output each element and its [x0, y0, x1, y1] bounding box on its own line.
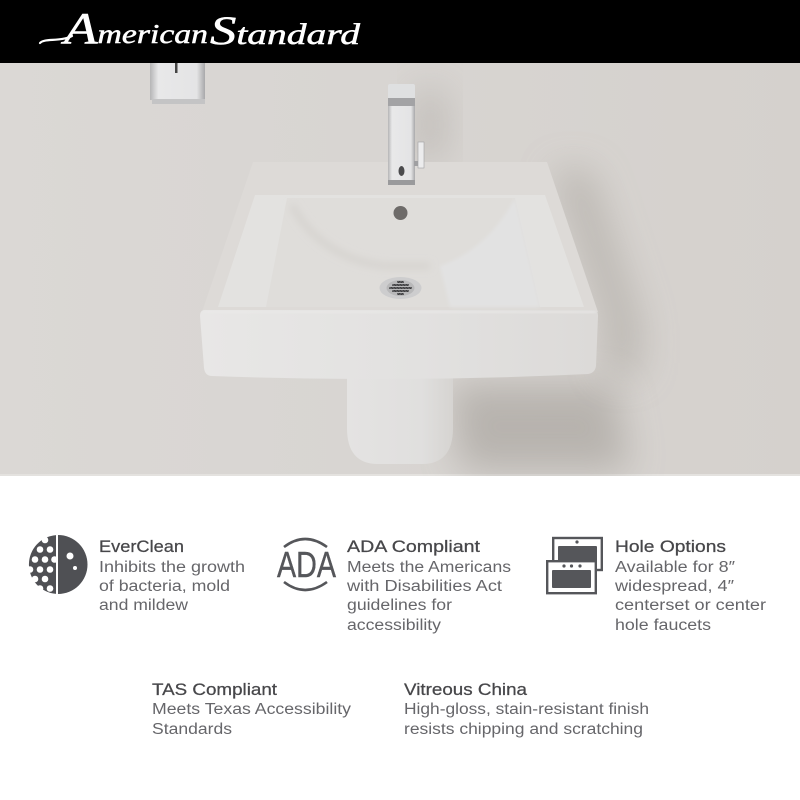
basin rim	[218, 195, 584, 307]
description: TAS Compliant: Standards	[152, 721, 232, 738]
icon: EverClean half-circle	[27, 535, 88, 594]
basin front face	[200, 310, 598, 379]
feature: ADA Compliant	[277, 538, 511, 634]
bowl	[288, 203, 432, 272]
heading: TAS Compliant: TAS Compliant	[152, 681, 277, 699]
description: TAS Compliant: Meets Texas Accessibility	[152, 701, 351, 718]
heading: ADA Compliant: ADA Compliant	[347, 538, 480, 556]
description: EverClean: of bacteria, mold	[99, 578, 230, 595]
feature: TAS Compliant	[152, 681, 351, 738]
description: Hole Options: widespread, 4″	[614, 578, 735, 595]
description: Vitreous China: resists chipping and scratching	[404, 721, 643, 738]
description: Vitreous China	[404, 701, 649, 738]
feature: Vitreous China	[404, 681, 649, 738]
feature: EverClean	[27, 535, 245, 614]
description: ADA Compliant: with Disabilities Act	[346, 578, 503, 595]
overflow hole	[394, 206, 408, 220]
description: ADA Compliant	[346, 559, 511, 634]
pedestal	[347, 378, 453, 464]
photo: wall-mounted sink	[0, 63, 800, 476]
description: Hole Options: centerset or center	[615, 597, 766, 614]
brand logo	[40, 4, 361, 53]
icon: sink hole options	[547, 538, 602, 593]
description: EverClean: Inhibits the growth	[99, 559, 245, 576]
heading: Hole Options: Hole Options	[615, 538, 726, 556]
description: EverClean	[99, 559, 245, 614]
icon: ADA: ADA	[277, 544, 336, 585]
description: ADA Compliant: accessibility	[347, 617, 441, 634]
icon: ADA	[277, 539, 336, 590]
faucet	[388, 84, 424, 185]
description: Hole Options: hole faucets	[615, 617, 711, 634]
description: ADA Compliant: guidelines for	[347, 597, 452, 614]
description: Hole Options	[614, 559, 766, 634]
brand logo: Standard	[210, 8, 361, 53]
wall	[0, 63, 800, 476]
header band	[0, 0, 800, 63]
soap dispenser	[150, 63, 205, 104]
drain	[380, 277, 422, 299]
basin deck	[415, 162, 598, 312]
wall shadow under and beside basin	[450, 384, 630, 470]
heading: EverClean: EverClean	[99, 538, 184, 556]
description: TAS Compliant	[152, 701, 351, 738]
heading: Vitreous China: Vitreous China	[404, 681, 528, 699]
description: EverClean: and mildew	[99, 597, 189, 614]
description: Hole Options: Available for 8″	[615, 559, 736, 576]
description: Vitreous China: High-gloss, stain-resistant finish	[404, 701, 649, 718]
brand logo: American	[60, 4, 208, 53]
description: ADA Compliant: Meets the Americans	[347, 559, 511, 576]
feature: Hole Options	[547, 538, 766, 634]
